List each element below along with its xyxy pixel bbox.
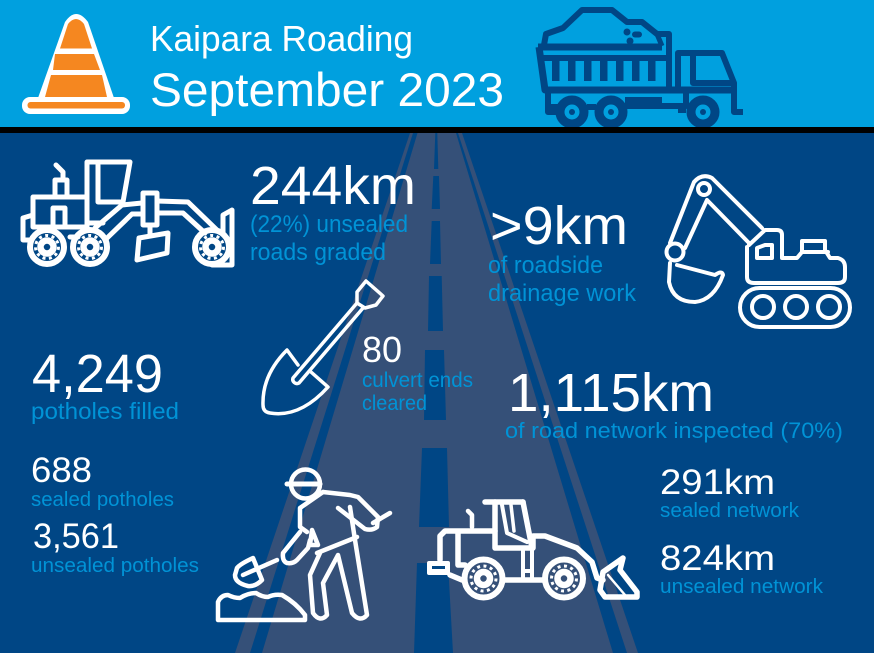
loader wheels bbox=[464, 560, 583, 598]
stat: 80 culvert ends cleared bbox=[362, 329, 473, 415]
icon: excavator bbox=[666, 176, 850, 327]
black divider strip bbox=[0, 127, 874, 133]
icon: dump truck bbox=[538, 10, 743, 124]
caption: cleared: cleared bbox=[362, 392, 427, 415]
figure: 291km: 291km bbox=[660, 463, 775, 502]
stat: 1,115km road network inspected bbox=[505, 363, 843, 443]
title line: Kaipara Roading: Kaipara Roading bbox=[150, 18, 413, 59]
icon: road worker with shovel bbox=[218, 470, 390, 620]
figure: 688: 688 bbox=[31, 451, 92, 490]
counterweight slot bbox=[432, 566, 445, 569]
stat: 4,249 potholes filled bbox=[31, 344, 179, 424]
stat: 291km sealed network bbox=[660, 463, 800, 522]
caption: potholes filled: potholes filled bbox=[31, 398, 179, 424]
stat: 3,561 unsealed potholes bbox=[31, 517, 199, 577]
caption: sealed potholes: sealed potholes bbox=[31, 489, 174, 511]
stat: 688 sealed potholes bbox=[31, 451, 174, 511]
caption: roads graded: roads graded bbox=[250, 239, 386, 266]
stat: 824km unsealed network bbox=[660, 539, 824, 598]
figure: 4,249: 4,249 bbox=[32, 344, 163, 404]
panel: header band bbox=[0, 0, 874, 127]
caption: of roadside: of roadside bbox=[488, 252, 603, 279]
figure: 1,115km: 1,115km bbox=[508, 363, 714, 423]
caption: drainage work: drainage work bbox=[488, 280, 637, 307]
caption: of road network inspected: of road network inspected (70%) bbox=[505, 418, 843, 443]
icon: traffic cone bbox=[22, 14, 130, 114]
figure: 3,561: 3,561 bbox=[33, 517, 119, 556]
icon: front loader bbox=[427, 502, 637, 598]
icon: shovel bbox=[263, 281, 383, 414]
loader rear counterweight bbox=[427, 561, 450, 575]
caption: sealed network: sealed network bbox=[660, 500, 800, 522]
caption: unsealed network: unsealed network bbox=[660, 576, 824, 598]
figure: 80: 80 bbox=[362, 329, 402, 370]
figure: >9km: >9km bbox=[490, 196, 628, 256]
stat: over 9km roadside drainage bbox=[488, 196, 637, 307]
stat: 244km unsealed roads graded bbox=[250, 156, 416, 266]
figure: 824km: 824km bbox=[660, 539, 775, 578]
title bbox=[150, 18, 504, 116]
caption: 22 percent unsealed: (22%) unsealed bbox=[250, 211, 408, 238]
caption: unsealed potholes: unsealed potholes bbox=[31, 555, 199, 577]
figure: 244km: 244km bbox=[250, 156, 416, 216]
title line: September 2023: September 2023 bbox=[150, 63, 504, 116]
caption: culvert ends: culvert ends bbox=[362, 369, 473, 392]
icon: road grader bbox=[23, 162, 232, 265]
